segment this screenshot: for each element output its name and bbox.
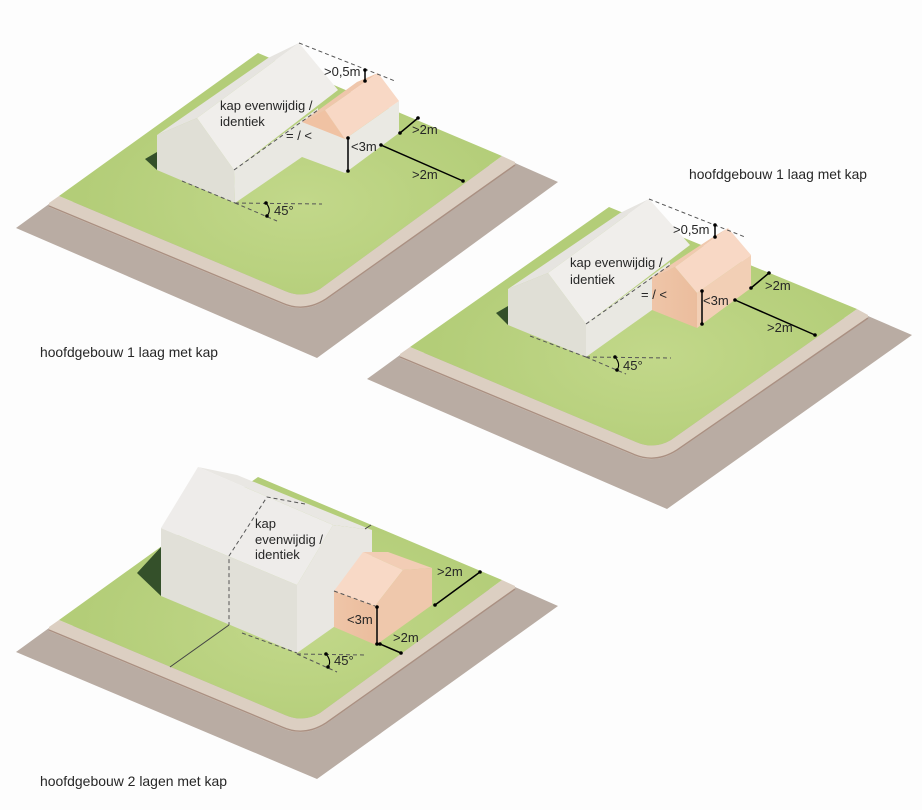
labels: evenwijdig / [255,532,323,547]
annex roof front [334,552,403,606]
labels [255,516,463,668]
labels: = / < [641,287,667,302]
front roof slope [161,467,333,585]
labels: identiek [255,547,300,562]
kerb edge [49,589,515,731]
annex [652,228,751,328]
main house [508,199,690,357]
front roof slope [548,199,690,324]
sidewalk [400,309,868,459]
front roof slope [197,43,338,170]
annex gable wall [302,110,345,173]
back roof slope [157,43,299,135]
kerb edge [49,165,515,307]
grass plot [410,207,857,446]
dimension dots [264,68,465,218]
kerb edge [400,318,868,458]
caption: hoofdgebouw 2 lagen met kap [40,773,227,789]
front wall [161,528,297,653]
grass plot [59,477,502,719]
labels: identiek [220,114,265,129]
labels: kap [255,516,276,531]
caption: hoofdgebouw 1 laag met kap [40,344,218,360]
labels: <3m [347,612,373,627]
dashed guides [182,43,395,221]
dimension dots [324,570,482,669]
grass plot [59,53,502,295]
dashed guides [229,497,375,672]
annex roof back [652,228,728,277]
annex [334,552,432,645]
main house shadow [145,152,157,170]
main house shadow [137,547,161,596]
gable wall [508,273,586,357]
labels: >2m [767,320,793,335]
side wall [586,262,670,357]
dimension lines [377,572,480,653]
scene: hoofdgebouw 1 laag met kap, right [367,166,912,509]
annex roof front [675,228,751,293]
labels: <3m [703,293,729,308]
road [16,587,558,779]
annex gable wall [652,267,697,328]
annex roof front [325,73,399,139]
thin plot lines [170,525,371,667]
annex roof back [363,552,432,570]
annex gable roof [302,110,345,139]
gable wall [297,525,372,653]
annex roof back [302,73,378,122]
plot base [367,207,912,509]
labels: >2m [412,167,438,182]
labels: identiek [570,272,615,287]
scene: hoofdgebouw 2 lagen met kap [16,467,558,789]
labels: = / < [286,128,312,143]
gable wall [157,118,235,203]
labels: kap evenwijdig / [220,98,313,113]
labels: >2m [412,122,438,137]
labels: <3m [351,139,377,154]
road [367,316,912,509]
annex front wall [334,591,376,645]
sidewalk [49,156,515,308]
sidewalk [49,580,515,732]
annex side wall [697,255,751,328]
labels [220,64,438,218]
dimension lines [348,70,463,181]
labels: 45° [334,653,354,668]
labels: 45° [623,358,643,373]
labels: 45° [274,203,294,218]
annex side wall [345,101,399,173]
labels: >2m [765,278,791,293]
labels: >0,5m [673,222,710,237]
45 degree arc [266,203,269,216]
annex [302,73,399,173]
scene: hoofdgebouw 1 laag met kap, left [16,43,558,360]
dimension lines [702,225,815,335]
back roof slope [508,199,649,289]
back roof slope [198,467,372,530]
main house shadow [496,306,508,325]
labels: >2m [437,564,463,579]
caption: hoofdgebouw 1 laag met kap [689,166,867,182]
main house [157,43,338,203]
labels: >2m [393,630,419,645]
plot base [16,477,558,779]
labels: >0,5m [324,64,360,79]
side wall [234,108,318,203]
road [16,163,558,358]
main house [161,467,372,653]
annex side wall [375,568,432,645]
45 degree arc [326,654,330,667]
45 degree arc [615,357,619,370]
labels: kap evenwijdig / [570,255,663,270]
dimension dots [613,223,817,372]
labels [570,222,793,373]
dashed guides [530,199,745,374]
